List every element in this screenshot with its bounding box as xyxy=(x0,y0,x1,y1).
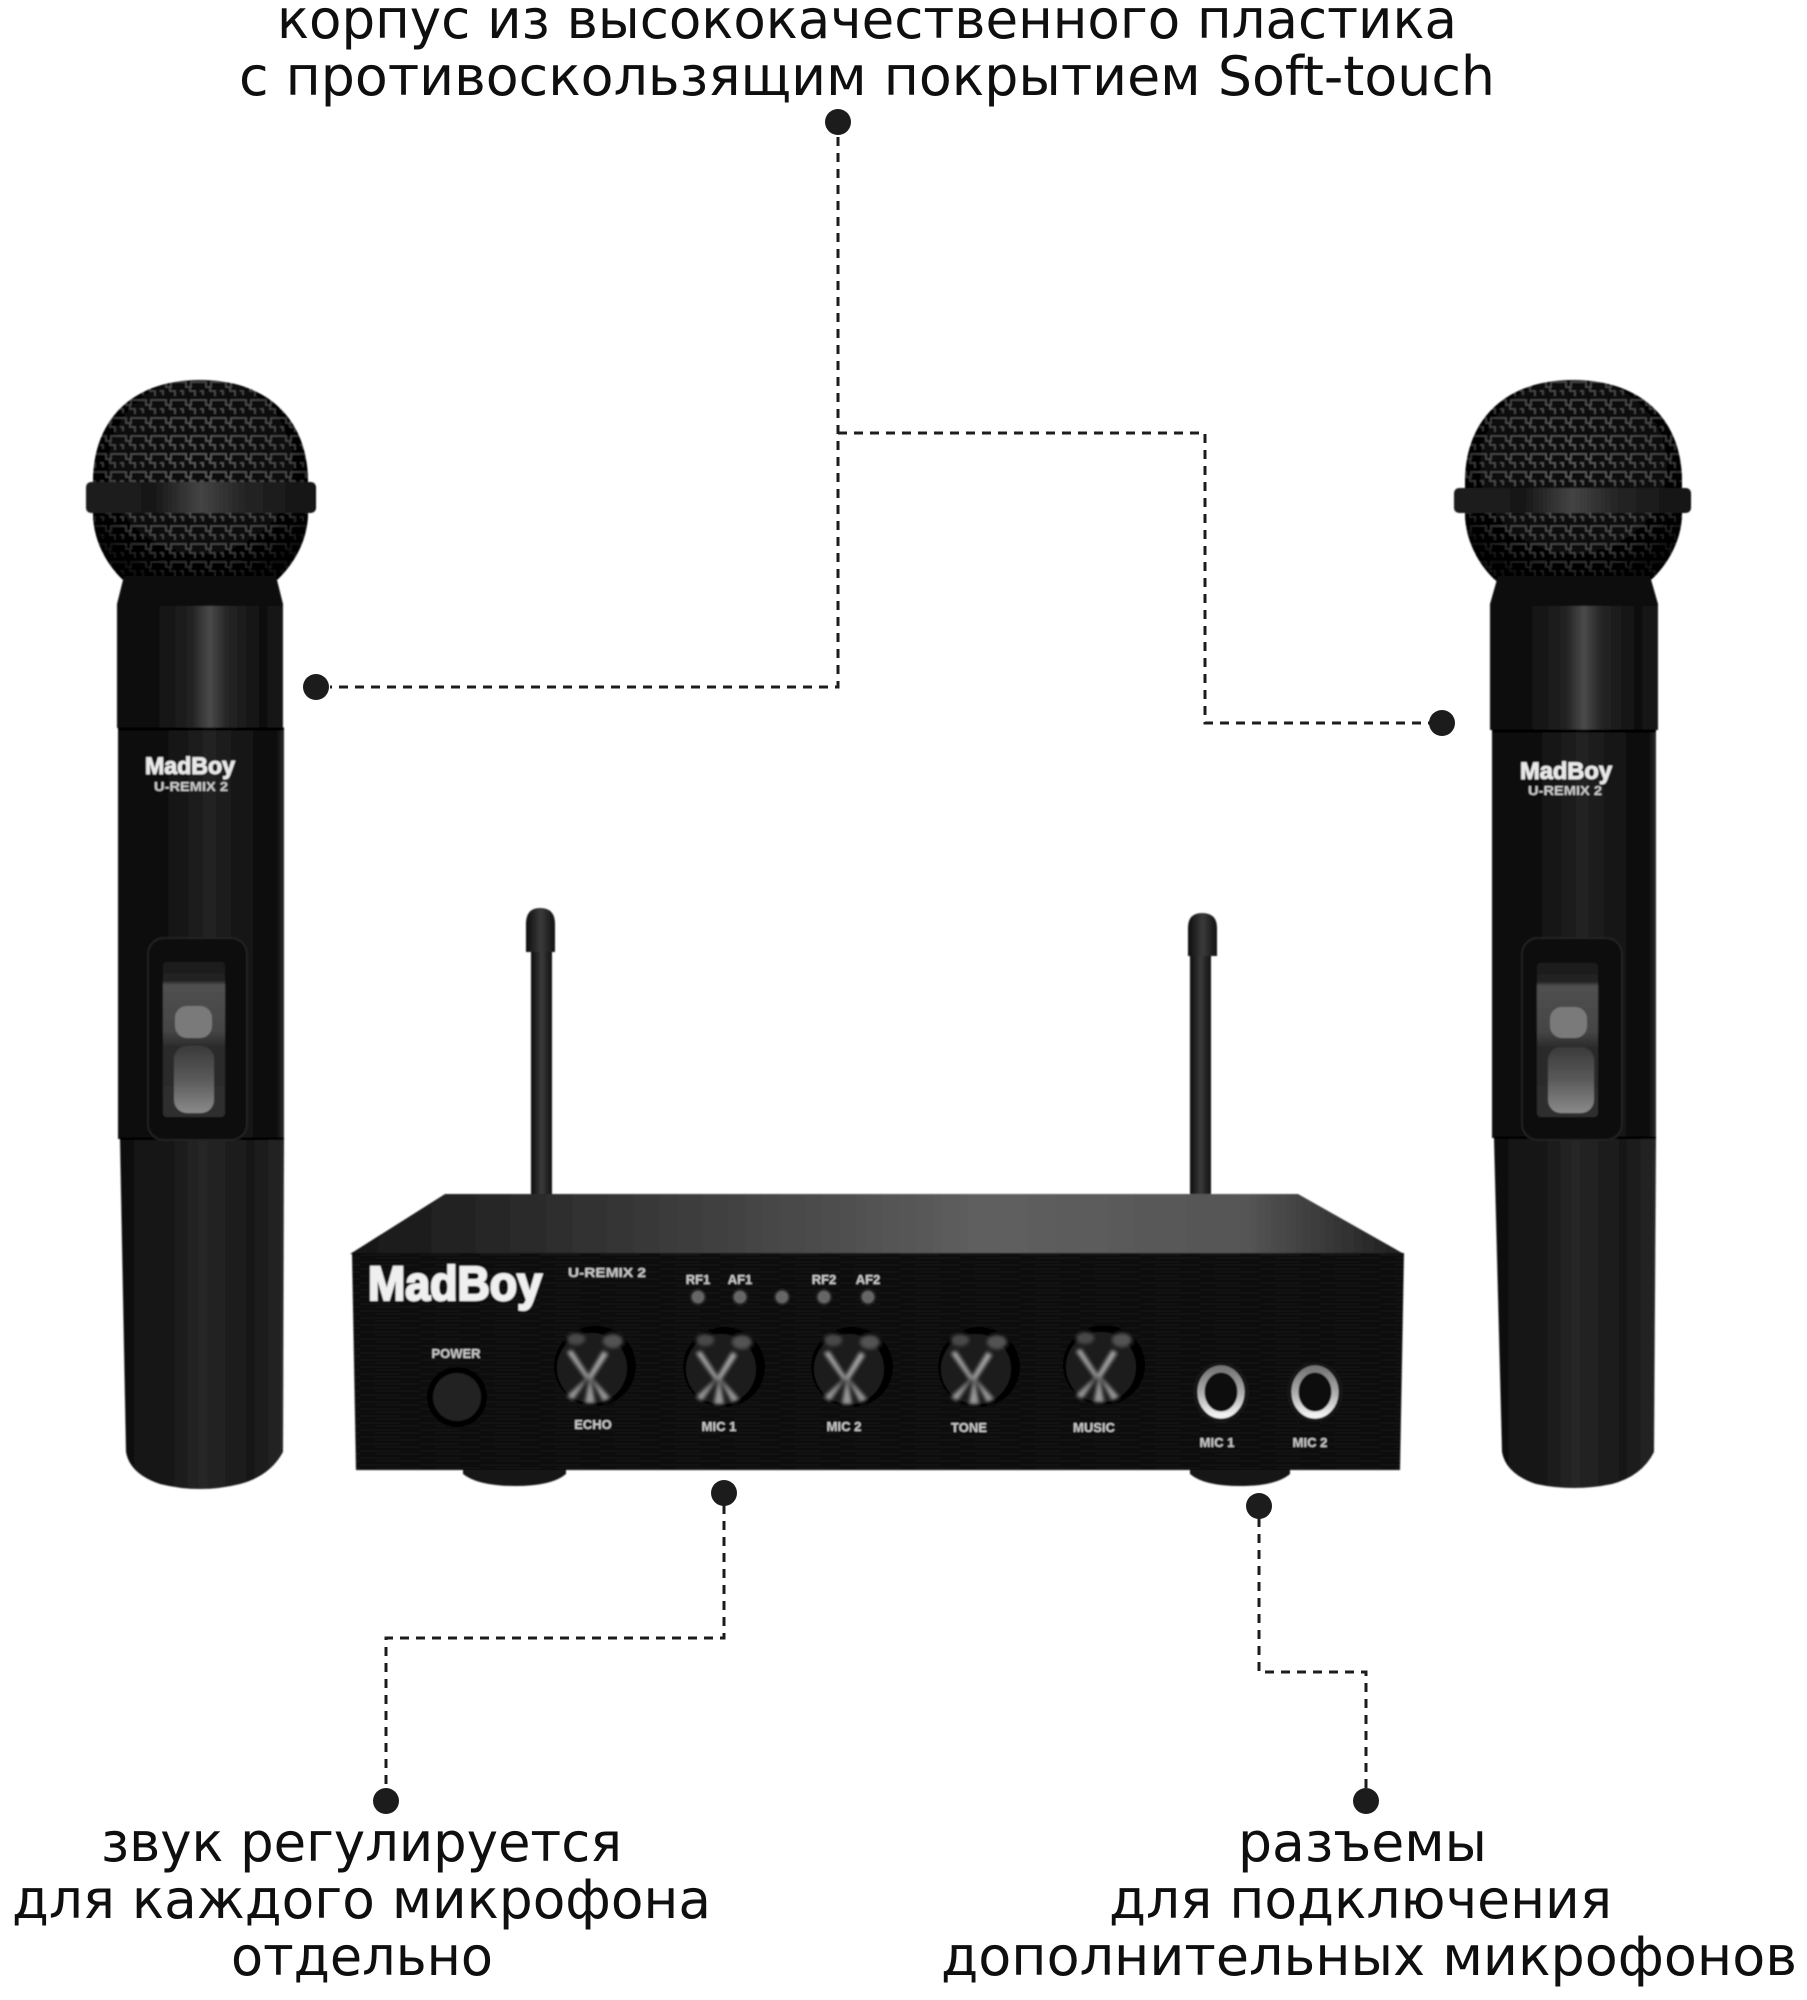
microphone: right xyxy=(1454,380,1691,1488)
jack: mic 1 xyxy=(1193,1362,1249,1450)
callout connector: extra mic jacks xyxy=(1246,1493,1379,1814)
logo: MadBoy xyxy=(1520,758,1613,785)
knob: mic 1: MIC 1 xyxy=(702,1419,736,1434)
collar xyxy=(117,576,283,612)
foot right xyxy=(1190,1465,1290,1486)
grille ring xyxy=(1454,488,1691,513)
middle body xyxy=(118,728,284,1139)
grille ring xyxy=(86,482,316,513)
antenna left xyxy=(526,908,555,1200)
switch window xyxy=(148,938,247,1140)
text: separate volume: отдельно xyxy=(231,1925,493,1988)
knob: tone: TONE xyxy=(951,1420,987,1435)
LEDs xyxy=(691,1290,875,1304)
knob: mic 1 xyxy=(683,1327,765,1434)
collar xyxy=(1490,576,1658,612)
antenna right xyxy=(1188,913,1217,1200)
text: separate volume: для каждого микрофона xyxy=(12,1868,711,1931)
knob: tone xyxy=(938,1327,1020,1435)
LED labels xyxy=(686,1272,880,1287)
brand logo: MadBoy xyxy=(368,1258,542,1311)
receiver unit xyxy=(350,908,1404,1486)
lower body xyxy=(120,1140,284,1489)
power button: POWER xyxy=(431,1346,481,1361)
text: connectors: для подключения xyxy=(1109,1868,1612,1931)
model name: U-REMIX 2 xyxy=(568,1265,646,1280)
top plate xyxy=(350,1194,1404,1254)
jack: mic 1: MIC 1 xyxy=(1200,1435,1234,1450)
lower body xyxy=(1494,1139,1656,1488)
upper body xyxy=(117,606,283,728)
middle body xyxy=(1492,730,1656,1138)
text: connectors: дополнительных микрофонов xyxy=(941,1925,1797,1988)
LED labels: AF2 xyxy=(856,1272,880,1287)
text: connectors: разъемы xyxy=(1238,1811,1487,1874)
knob: music: MUSIC xyxy=(1073,1420,1116,1435)
switch window xyxy=(1522,938,1622,1140)
microphone: left xyxy=(86,380,316,1489)
foot left xyxy=(463,1465,566,1486)
knob: mic 2: MIC 2 xyxy=(827,1419,861,1434)
LED labels: RF1 xyxy=(686,1272,710,1287)
body seam xyxy=(118,729,284,1139)
grille xyxy=(93,380,308,584)
callout connector: top dot to both microphones xyxy=(303,109,1455,736)
grille xyxy=(1465,380,1682,584)
upper body xyxy=(1490,606,1658,730)
front panel xyxy=(352,1253,1404,1470)
callout connector: volume control xyxy=(373,1480,737,1814)
LED labels: AF1 xyxy=(728,1272,752,1287)
knob: echo xyxy=(554,1326,636,1432)
knob: echo: ECHO xyxy=(574,1417,612,1432)
power button xyxy=(427,1346,487,1427)
text: body material: с противоскользящим покрытием Soft-touch xyxy=(239,45,1495,108)
text: body material xyxy=(239,0,1495,108)
knob: mic 2 xyxy=(811,1327,893,1434)
knob: music xyxy=(1063,1325,1145,1435)
jack: mic 2 xyxy=(1287,1362,1343,1450)
text: connectors xyxy=(941,1811,1797,1988)
text: separate volume: звук регулируется xyxy=(101,1811,622,1874)
model label: U-REMIX 2 xyxy=(154,779,228,794)
model label: U-REMIX 2 xyxy=(1528,783,1602,798)
logo: MadBoy xyxy=(145,753,236,780)
LED labels: RF2 xyxy=(812,1272,836,1287)
jack: mic 2: MIC 2 xyxy=(1293,1435,1327,1450)
text: separate volume xyxy=(12,1811,711,1988)
body seam xyxy=(1492,731,1656,1138)
